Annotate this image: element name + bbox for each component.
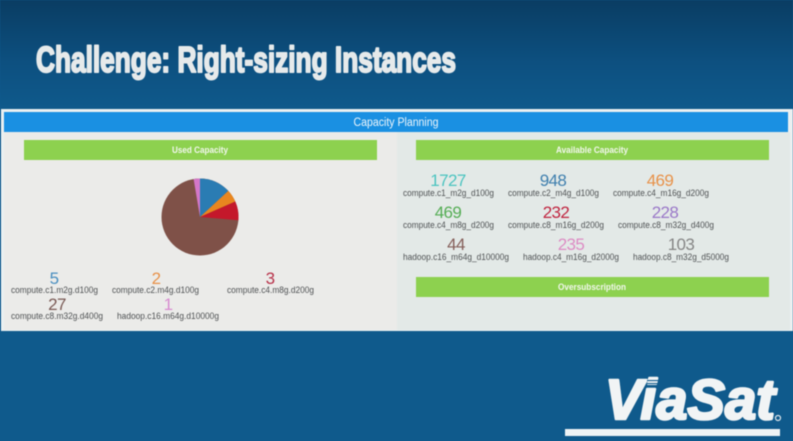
stat: hadoop.c4_m16g_d2000g: 235	[558, 235, 584, 254]
stat: compute.c8_m16g_d200g: compute.c8_m16g_d200g	[508, 220, 604, 230]
stat: hadoop.c4_m16g_d2000g	[523, 235, 619, 262]
stat: hadoop.c16_m64g_d10000g: 44	[447, 235, 465, 254]
stat: compute.c4.m8g.d200g: compute.c4.m8g.d200g	[227, 285, 314, 295]
stat: compute.c1_m2g_d100g	[403, 171, 494, 198]
stat: compute.c4_m8g_d200g	[403, 203, 494, 230]
stat: hadoop.c16.m64g.d10000g: hadoop.c16.m64g.d10000g	[117, 311, 219, 321]
logo stripes	[647, 380, 663, 387]
stat: compute.c2.m4g.d100g: 2	[152, 269, 161, 288]
heading: used capacity	[24, 140, 377, 160]
stat: compute.c2.m4g.d100g	[112, 269, 199, 295]
stat: compute.c1.m2g.d100g: compute.c1.m2g.d100g	[11, 285, 98, 295]
stat: compute.c8_m32g_d400g: 228	[652, 203, 678, 222]
stat: compute.c2_m4g_d100g	[508, 171, 599, 198]
stat: compute.c2_m4g_d100g: compute.c2_m4g_d100g	[508, 188, 599, 198]
heading: oversubscription	[416, 277, 769, 297]
stat: compute.c4.m8g.d200g: 3	[266, 269, 275, 288]
panel: right area	[397, 132, 790, 330]
stat: compute.c4_m16g_d200g	[613, 171, 709, 198]
panel: left area	[4, 132, 397, 330]
stat: hadoop.c16.m64g.d10000g	[117, 295, 219, 321]
stat: compute.c4.m8g.d200g	[227, 269, 314, 295]
stat: hadoop.c8_m32g_d5000g: 103	[668, 235, 694, 254]
stat: compute.c1_m2g_d100g: compute.c1_m2g_d100g	[403, 188, 494, 198]
used capacity stats	[11, 269, 314, 321]
stat: compute.c2.m4g.d100g: compute.c2.m4g.d100g	[112, 285, 199, 295]
stat: compute.c1_m2g_d100g: 1727	[430, 171, 466, 190]
stat: hadoop.c8_m32g_d5000g	[633, 235, 729, 262]
stat: hadoop.c16_m64g_d10000g: hadoop.c16_m64g_d10000g	[403, 252, 509, 262]
stat: hadoop.c4_m16g_d2000g: hadoop.c4_m16g_d2000g	[523, 252, 619, 262]
stat: compute.c2_m4g_d100g: 948	[540, 171, 566, 190]
stat: compute.c8_m16g_d200g	[508, 203, 604, 230]
stat: compute.c8.m32g.d400g	[11, 295, 103, 321]
title: Challenge: Right-sizing Instances	[36, 39, 456, 80]
heading: available capacity: Available Capacity	[556, 145, 628, 155]
logo: ViaSat: ViaSat	[605, 368, 777, 432]
stat: hadoop.c16.m64g.d10000g: 1	[164, 295, 173, 314]
available capacity stats	[403, 171, 729, 262]
heading: available capacity	[416, 140, 769, 160]
stat: compute.c4_m16g_d200g: 469	[647, 171, 673, 190]
stat: compute.c8.m32g.d400g: compute.c8.m32g.d400g	[11, 311, 103, 321]
logo underline	[565, 429, 780, 436]
stat: hadoop.c16_m64g_d10000g	[403, 235, 509, 262]
stat: compute.c1.m2g.d100g: 5	[50, 269, 59, 288]
stat: compute.c1.m2g.d100g	[11, 269, 98, 295]
header bar: capacity planning: Capacity Planning	[354, 117, 438, 129]
stat: compute.c8_m16g_d200g: 232	[543, 203, 569, 222]
stat: compute.c8_m32g_d400g: compute.c8_m32g_d400g	[618, 220, 714, 230]
stat: compute.c4_m8g_d200g: 469	[435, 203, 461, 222]
header bar: capacity planning	[4, 112, 788, 132]
heading: oversubscription: Oversubscription	[558, 282, 626, 292]
pie chart: used capacity	[162, 178, 239, 256]
stat: compute.c4_m8g_d200g: compute.c4_m8g_d200g	[403, 220, 494, 230]
stat: compute.c8_m32g_d400g	[618, 203, 714, 230]
stat: compute.c8.m32g.d400g: 27	[48, 295, 66, 314]
stat: hadoop.c8_m32g_d5000g: hadoop.c8_m32g_d5000g	[633, 252, 729, 262]
panel background	[1, 109, 793, 331]
logo registered mark	[776, 416, 780, 420]
panel: capacity planning	[1, 109, 793, 331]
heading: used capacity: Used Capacity	[172, 145, 228, 155]
stat: compute.c4_m16g_d200g: compute.c4_m16g_d200g	[613, 188, 709, 198]
